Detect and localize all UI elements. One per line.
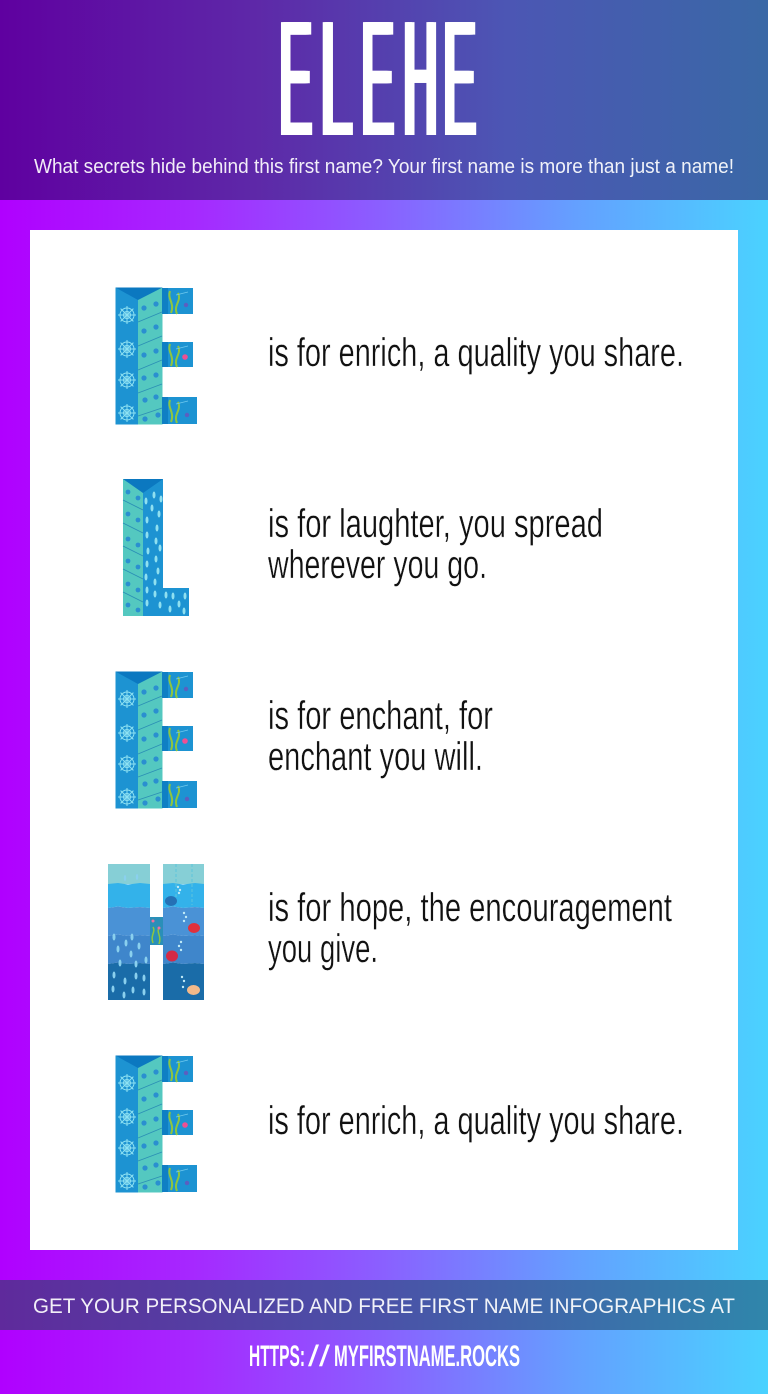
text: H for hope: you give.: [268, 927, 378, 971]
icon: letter L ocean pattern: [123, 479, 189, 616]
title: [277, 0, 476, 170]
text: E for enchant: enchant you will.: [268, 735, 483, 779]
text: E for enchant: [268, 694, 493, 779]
text: L for laughter: wherever you go.: [267, 543, 487, 587]
icon: letter H ocean scene: [108, 864, 204, 1000]
text: E for enchant: is for enchant, for: [268, 694, 493, 738]
subtitle: What secrets hide behind this first name? Your first name is more than just a name!: [34, 156, 734, 178]
footer link: [249, 1340, 520, 1373]
text: L for laughter: [267, 502, 603, 587]
icon: letter E ocean pattern: [116, 288, 197, 424]
footer link: //: [308, 1340, 331, 1373]
header band: [0, 0, 768, 200]
footer band: [0, 1280, 768, 1330]
icon: letter E ocean pattern: [116, 1056, 197, 1192]
white panel: [30, 230, 738, 1250]
footer call to action: GET YOUR PERSONALIZED AND FREE FIRST NAME INFOGRAPHICS AT: [33, 1295, 735, 1318]
text: L for laughter: is for laughter, you spread: [268, 502, 603, 546]
icon: letter E ocean pattern: [116, 672, 197, 808]
text: H for hope: [268, 886, 672, 971]
footer link: MYFIRSTNAME.ROCKS: [334, 1340, 520, 1373]
footer link: HTTPS:: [249, 1340, 305, 1373]
